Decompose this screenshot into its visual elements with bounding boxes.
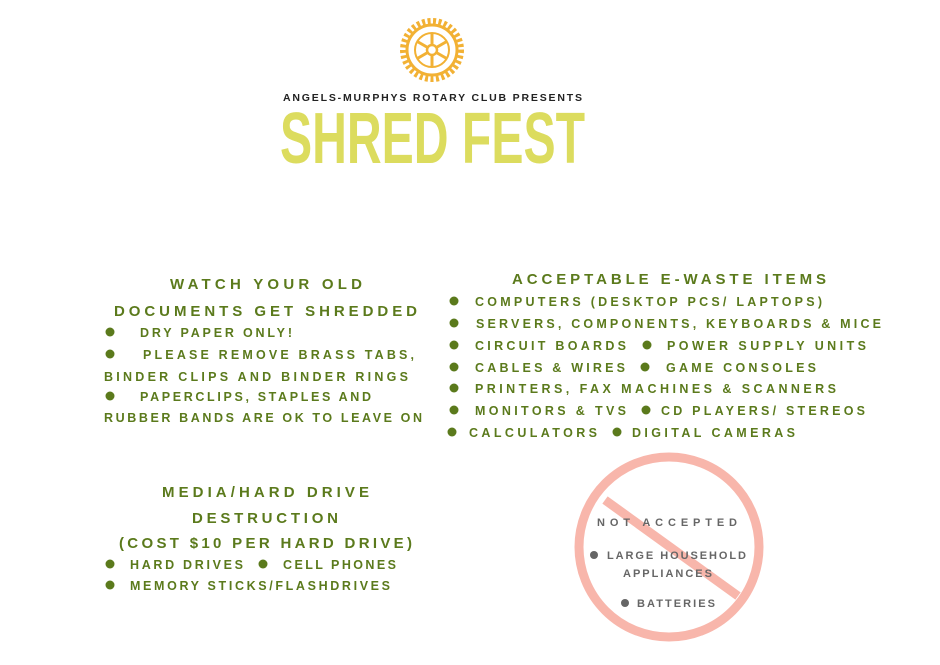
heading: e-waste: ACCEPTABLE E-WASTE ITEMS — [512, 271, 826, 288]
heading: media — [119, 484, 412, 552]
subtitle: ANGELS-MURPHYS ROTARY CLUB PRESENTS — [283, 92, 582, 104]
list: e-waste items: COMPUTERS (DESKTOP PCS/ LAPTOPS) — [475, 295, 822, 309]
list: e-waste items: CD PLAYERS/ STEREOS — [661, 404, 865, 418]
list: not accepted items — [590, 550, 746, 610]
list: paper rules — [104, 326, 422, 425]
list: not accepted items: LARGE HOUSEHOLD — [607, 550, 746, 562]
heading: not accepted: NOT ACCEPTED — [597, 517, 737, 529]
list: e-waste items: SERVERS, COMPONENTS, KEYBOARDS & MICE — [476, 317, 881, 331]
icon: rotary logo — [403, 21, 461, 79]
heading: media: (COST $10 PER HARD DRIVE) — [119, 535, 412, 552]
list: e-waste items: PRINTERS, FAX MACHINES & SCANNERS — [475, 382, 836, 396]
panel: media destruction — [106, 484, 412, 593]
list: e-waste items: CALCULATORS — [469, 426, 597, 440]
heading: media: DESTRUCTION — [192, 510, 338, 527]
list: not accepted items: APPLIANCES — [623, 568, 712, 580]
list: media items: CELL PHONES — [283, 558, 396, 572]
list: e-waste items: MONITORS & TVS — [475, 404, 626, 418]
panel: acceptable e-waste — [448, 271, 881, 440]
panel: not accepted — [579, 457, 759, 637]
list: paper rules: RUBBER BANDS ARE OK TO LEAVE ON — [104, 411, 422, 425]
icon: prohibition sign — [579, 457, 759, 637]
list: paper rules: PAPERCLIPS, STAPLES AND — [140, 390, 371, 404]
list: e-waste items: DIGITAL CAMERAS — [632, 426, 795, 440]
heading: media: MEDIA/HARD DRIVE — [162, 484, 369, 501]
list: media items — [106, 558, 396, 593]
heading: documents: DOCUMENTS GET SHREDDED — [114, 303, 417, 320]
list: e-waste items — [448, 295, 881, 440]
list: paper rules: DRY PAPER ONLY! — [140, 326, 292, 340]
heading: documents — [114, 276, 417, 320]
heading: documents: WATCH YOUR OLD — [170, 276, 362, 293]
list: e-waste items: POWER SUPPLY UNITS — [667, 339, 866, 353]
title: SHRED FEST — [280, 99, 585, 179]
list: e-waste items: CABLES & WIRES — [475, 361, 625, 375]
list: media items: MEMORY STICKS/FLASHDRIVES — [130, 579, 390, 593]
list: e-waste items: CIRCUIT BOARDS — [475, 339, 626, 353]
list: paper rules: BINDER CLIPS AND BINDER RINGS — [104, 370, 408, 384]
list: e-waste items: GAME CONSOLES — [666, 361, 816, 375]
list: not accepted items: BATTERIES — [637, 598, 715, 610]
list: media items: HARD DRIVES — [130, 558, 243, 572]
panel: documents shredding — [104, 276, 422, 425]
list: paper rules: PLEASE REMOVE BRASS TABS, — [143, 348, 414, 362]
